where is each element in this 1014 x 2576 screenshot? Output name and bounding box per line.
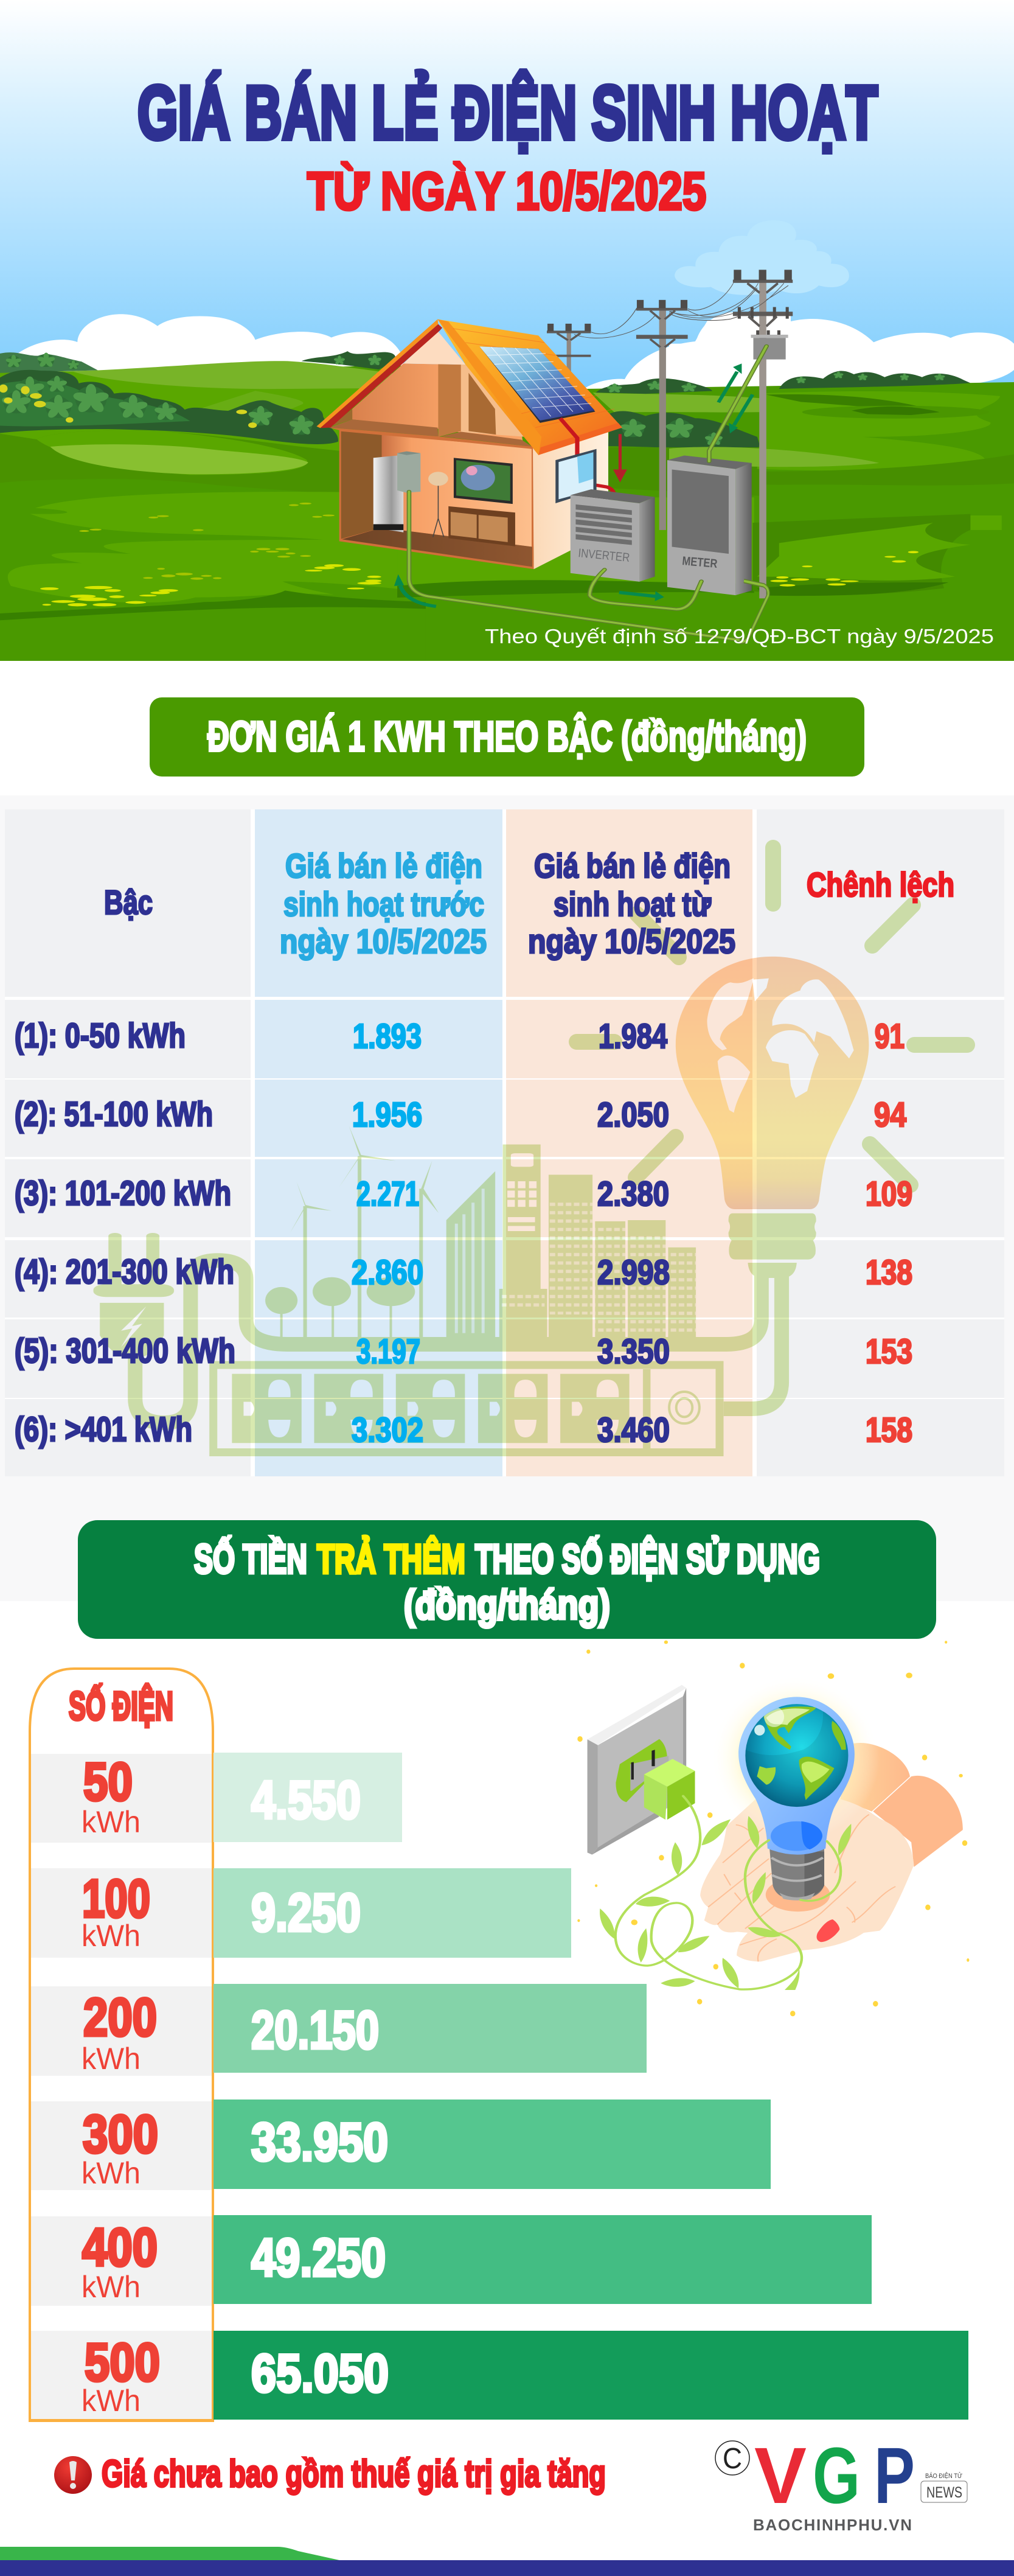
header: price before: Giá bán lẻ điện xyxy=(285,846,482,885)
side wall xyxy=(532,432,608,569)
label 100 kWh: kWh xyxy=(82,1919,141,1953)
left fascia xyxy=(316,319,438,428)
row 6: (6): >401 kWh xyxy=(15,1410,192,1449)
panel: kWh column xyxy=(29,1669,214,2422)
logo: VGP: V xyxy=(754,2431,807,2520)
label 500 kWh xyxy=(82,2332,160,2418)
label 50 kWh: kWh xyxy=(82,1805,141,1839)
header: price before xyxy=(280,846,487,960)
cloud: pale blue xyxy=(675,232,849,295)
hills right xyxy=(669,371,1014,596)
bar 9.250: 9.250 xyxy=(251,1882,361,1942)
row 1: 1.893 xyxy=(353,1017,422,1056)
row 1 xyxy=(15,1016,905,1056)
bar 33.950: 33.950 xyxy=(251,2112,388,2172)
row 4: 138 xyxy=(866,1253,912,1292)
label 100 kWh xyxy=(82,1868,150,1953)
label 200 kWh: 200 xyxy=(83,1987,157,2047)
row 1: (1): 0-50 kWh xyxy=(15,1016,186,1055)
yellow dots xyxy=(577,1641,969,2016)
row 5: 3.350 xyxy=(597,1332,670,1371)
bar 20.150: 20.150 xyxy=(251,2000,379,2060)
label 400 kWh xyxy=(82,2217,158,2304)
electric panel xyxy=(397,453,420,493)
row 2: (2): 51-100 kWh xyxy=(15,1095,213,1134)
yellow flecks xyxy=(40,564,381,606)
row 2: 94 xyxy=(874,1095,906,1134)
sky xyxy=(0,22,1014,388)
bar 33.950 xyxy=(214,2100,771,2189)
logo: VGP: C xyxy=(723,2443,742,2475)
row 5: (5): 301-400 kWh xyxy=(15,1332,235,1370)
row 2: 2.050 xyxy=(597,1095,669,1134)
ground base xyxy=(0,365,1014,661)
section heading: extra cost: THEO SỐ ĐIỆN SỬ DỤNG xyxy=(475,1535,820,1582)
row 3: 2.271 xyxy=(356,1175,419,1213)
row 5: 153 xyxy=(866,1332,912,1371)
row 3 xyxy=(15,1174,912,1213)
bar 4.550: 4.550 xyxy=(251,1770,361,1830)
section heading: extra cost: SỐ TIỀN xyxy=(194,1535,307,1582)
header: price from: Giá bán lẻ điện xyxy=(534,846,731,885)
orange outline xyxy=(30,1669,213,2420)
roof xyxy=(437,319,622,455)
TV xyxy=(454,458,513,504)
row 4 xyxy=(15,1252,912,1292)
red nail xyxy=(817,1919,839,1942)
floor xyxy=(342,528,532,567)
logo: VGP: BAOCHINHPHU.VN xyxy=(753,2516,912,2534)
green arrows xyxy=(394,363,752,606)
label 300 kWh xyxy=(82,2104,158,2190)
section heading: extra cost: (đồng/tháng) xyxy=(404,1582,610,1628)
bar 65.050: 65.050 xyxy=(251,2343,389,2403)
icon: warning xyxy=(54,2456,92,2494)
watermark: light rays xyxy=(577,848,967,1185)
label 200 kWh: kWh xyxy=(82,2042,141,2076)
hand xyxy=(700,1791,914,1961)
hills middle xyxy=(397,379,791,598)
green cables xyxy=(409,346,766,640)
label 100 kWh: 100 xyxy=(82,1868,150,1929)
watermark: globe bulb xyxy=(676,957,869,1278)
window xyxy=(555,449,597,503)
row 6: 3.460 xyxy=(597,1411,670,1450)
turbines xyxy=(305,1156,421,1337)
fairway xyxy=(0,432,339,469)
header: price before: ngày 10/5/2025 xyxy=(280,922,487,960)
logo: VGP xyxy=(715,2431,967,2534)
panel: hero scene xyxy=(0,0,1014,661)
label 200 kWh xyxy=(82,1987,157,2076)
left interior wall xyxy=(341,431,382,539)
light lawn xyxy=(8,492,426,602)
footer band xyxy=(0,2547,1014,2576)
row 3: 2.380 xyxy=(597,1175,669,1213)
red arrow xyxy=(616,434,625,480)
label 300 kWh: 300 xyxy=(83,2104,158,2164)
row 3: (3): 101-200 kWh xyxy=(15,1174,231,1213)
bar 65.050 xyxy=(214,2331,968,2420)
row 1: 1.984 xyxy=(599,1017,667,1056)
watermark: eco city and power strip xyxy=(93,848,967,1453)
header: difference: Chênh lệch xyxy=(807,865,954,904)
row 4: 2.860 xyxy=(352,1253,423,1292)
bulb glass xyxy=(738,1697,855,1855)
buildings xyxy=(446,1171,495,1337)
section heading: extra cost: TRẢ THÊM xyxy=(317,1535,465,1582)
attic wall xyxy=(352,363,523,442)
clouds: white left xyxy=(18,314,404,371)
section heading: unit price xyxy=(150,697,864,777)
section heading: extra cost xyxy=(78,1520,936,1639)
power poles and wires xyxy=(547,270,793,598)
clouds: white middle xyxy=(586,316,791,389)
illustration: bulb in hand with plug xyxy=(577,1641,969,2016)
subtitle: date: TỪ NGÀY 10/5/2025 xyxy=(307,162,706,221)
label 50 kWh: 50 xyxy=(83,1751,133,1812)
logo: VGP: P xyxy=(874,2431,915,2520)
back wall xyxy=(382,435,532,547)
house illustration xyxy=(316,319,766,640)
label: meter: METER xyxy=(682,554,718,571)
bar 4.550 xyxy=(214,1753,402,1842)
hills left xyxy=(0,351,426,621)
glow xyxy=(711,1676,880,1840)
row 6 xyxy=(15,1410,912,1450)
header: price from xyxy=(528,846,735,960)
label 50 kWh xyxy=(82,1751,141,1839)
logo: VGP: NEWS xyxy=(926,2484,962,2501)
bar 49.250: 49.250 xyxy=(251,2227,386,2288)
row 2: 1.956 xyxy=(352,1095,422,1134)
far hedge right xyxy=(779,371,970,389)
header: tier: Bậc xyxy=(104,883,153,921)
solar panel xyxy=(479,346,596,423)
cabinet xyxy=(448,506,515,546)
label 400 kWh: kWh xyxy=(82,2270,141,2304)
lamp xyxy=(433,484,444,537)
clouds: white right xyxy=(669,312,1014,383)
label 500 kWh: 500 xyxy=(85,2332,160,2392)
header: price before: sinh hoạt trước xyxy=(283,885,484,923)
wall socket xyxy=(588,1685,686,1855)
header: price from: sinh hoạt từ xyxy=(554,885,711,923)
row 5: 3.197 xyxy=(356,1332,420,1371)
row 1: 91 xyxy=(875,1017,905,1056)
vine xyxy=(600,1796,851,1990)
room frame xyxy=(339,430,534,569)
note: VAT: Giá chưa bao gồm thuế giá trị gia tăng xyxy=(102,2453,606,2495)
sleeve xyxy=(840,1743,910,1812)
green plug xyxy=(616,1739,695,1820)
foreground hedge xyxy=(0,370,338,444)
fridge xyxy=(373,456,403,532)
row 6: 3.302 xyxy=(352,1411,423,1450)
cable to pole xyxy=(740,581,768,642)
row 3: 109 xyxy=(866,1175,912,1213)
label: inverter: INVERTER xyxy=(578,546,630,565)
bulb screw base xyxy=(769,1846,824,1901)
inverter box xyxy=(571,489,655,503)
globe xyxy=(745,1704,848,1807)
logo: VGP: BÁO ĐIỆN TỬ xyxy=(925,2472,962,2480)
meter box xyxy=(667,456,752,469)
source note: Theo Quyết định số 1279/QĐ-BCT ngày 9/5/2025 xyxy=(485,625,994,647)
row 4: 2.998 xyxy=(597,1253,670,1292)
label 300 kWh: kWh xyxy=(82,2156,141,2190)
row 5 xyxy=(15,1332,912,1371)
row 6: 158 xyxy=(866,1411,912,1450)
panel: price table xyxy=(0,795,1014,1601)
row 2 xyxy=(15,1095,906,1134)
bar chart: extra cost xyxy=(214,1753,968,2420)
table columns xyxy=(5,809,1004,1476)
row 4: (4): 201-300 kWh xyxy=(15,1252,234,1291)
header: price from: ngày 10/5/2025 xyxy=(528,922,735,960)
label 400 kWh: 400 xyxy=(82,2217,158,2277)
logo: VGP: G xyxy=(813,2431,860,2520)
red cable xyxy=(560,418,614,497)
bar 49.250 xyxy=(214,2215,872,2304)
bar 9.250 xyxy=(214,1868,571,1958)
bar 20.150 xyxy=(214,1984,647,2073)
label 500 kWh: kWh xyxy=(82,2384,141,2418)
column heading: SỐ ĐIỆN xyxy=(69,1683,173,1728)
